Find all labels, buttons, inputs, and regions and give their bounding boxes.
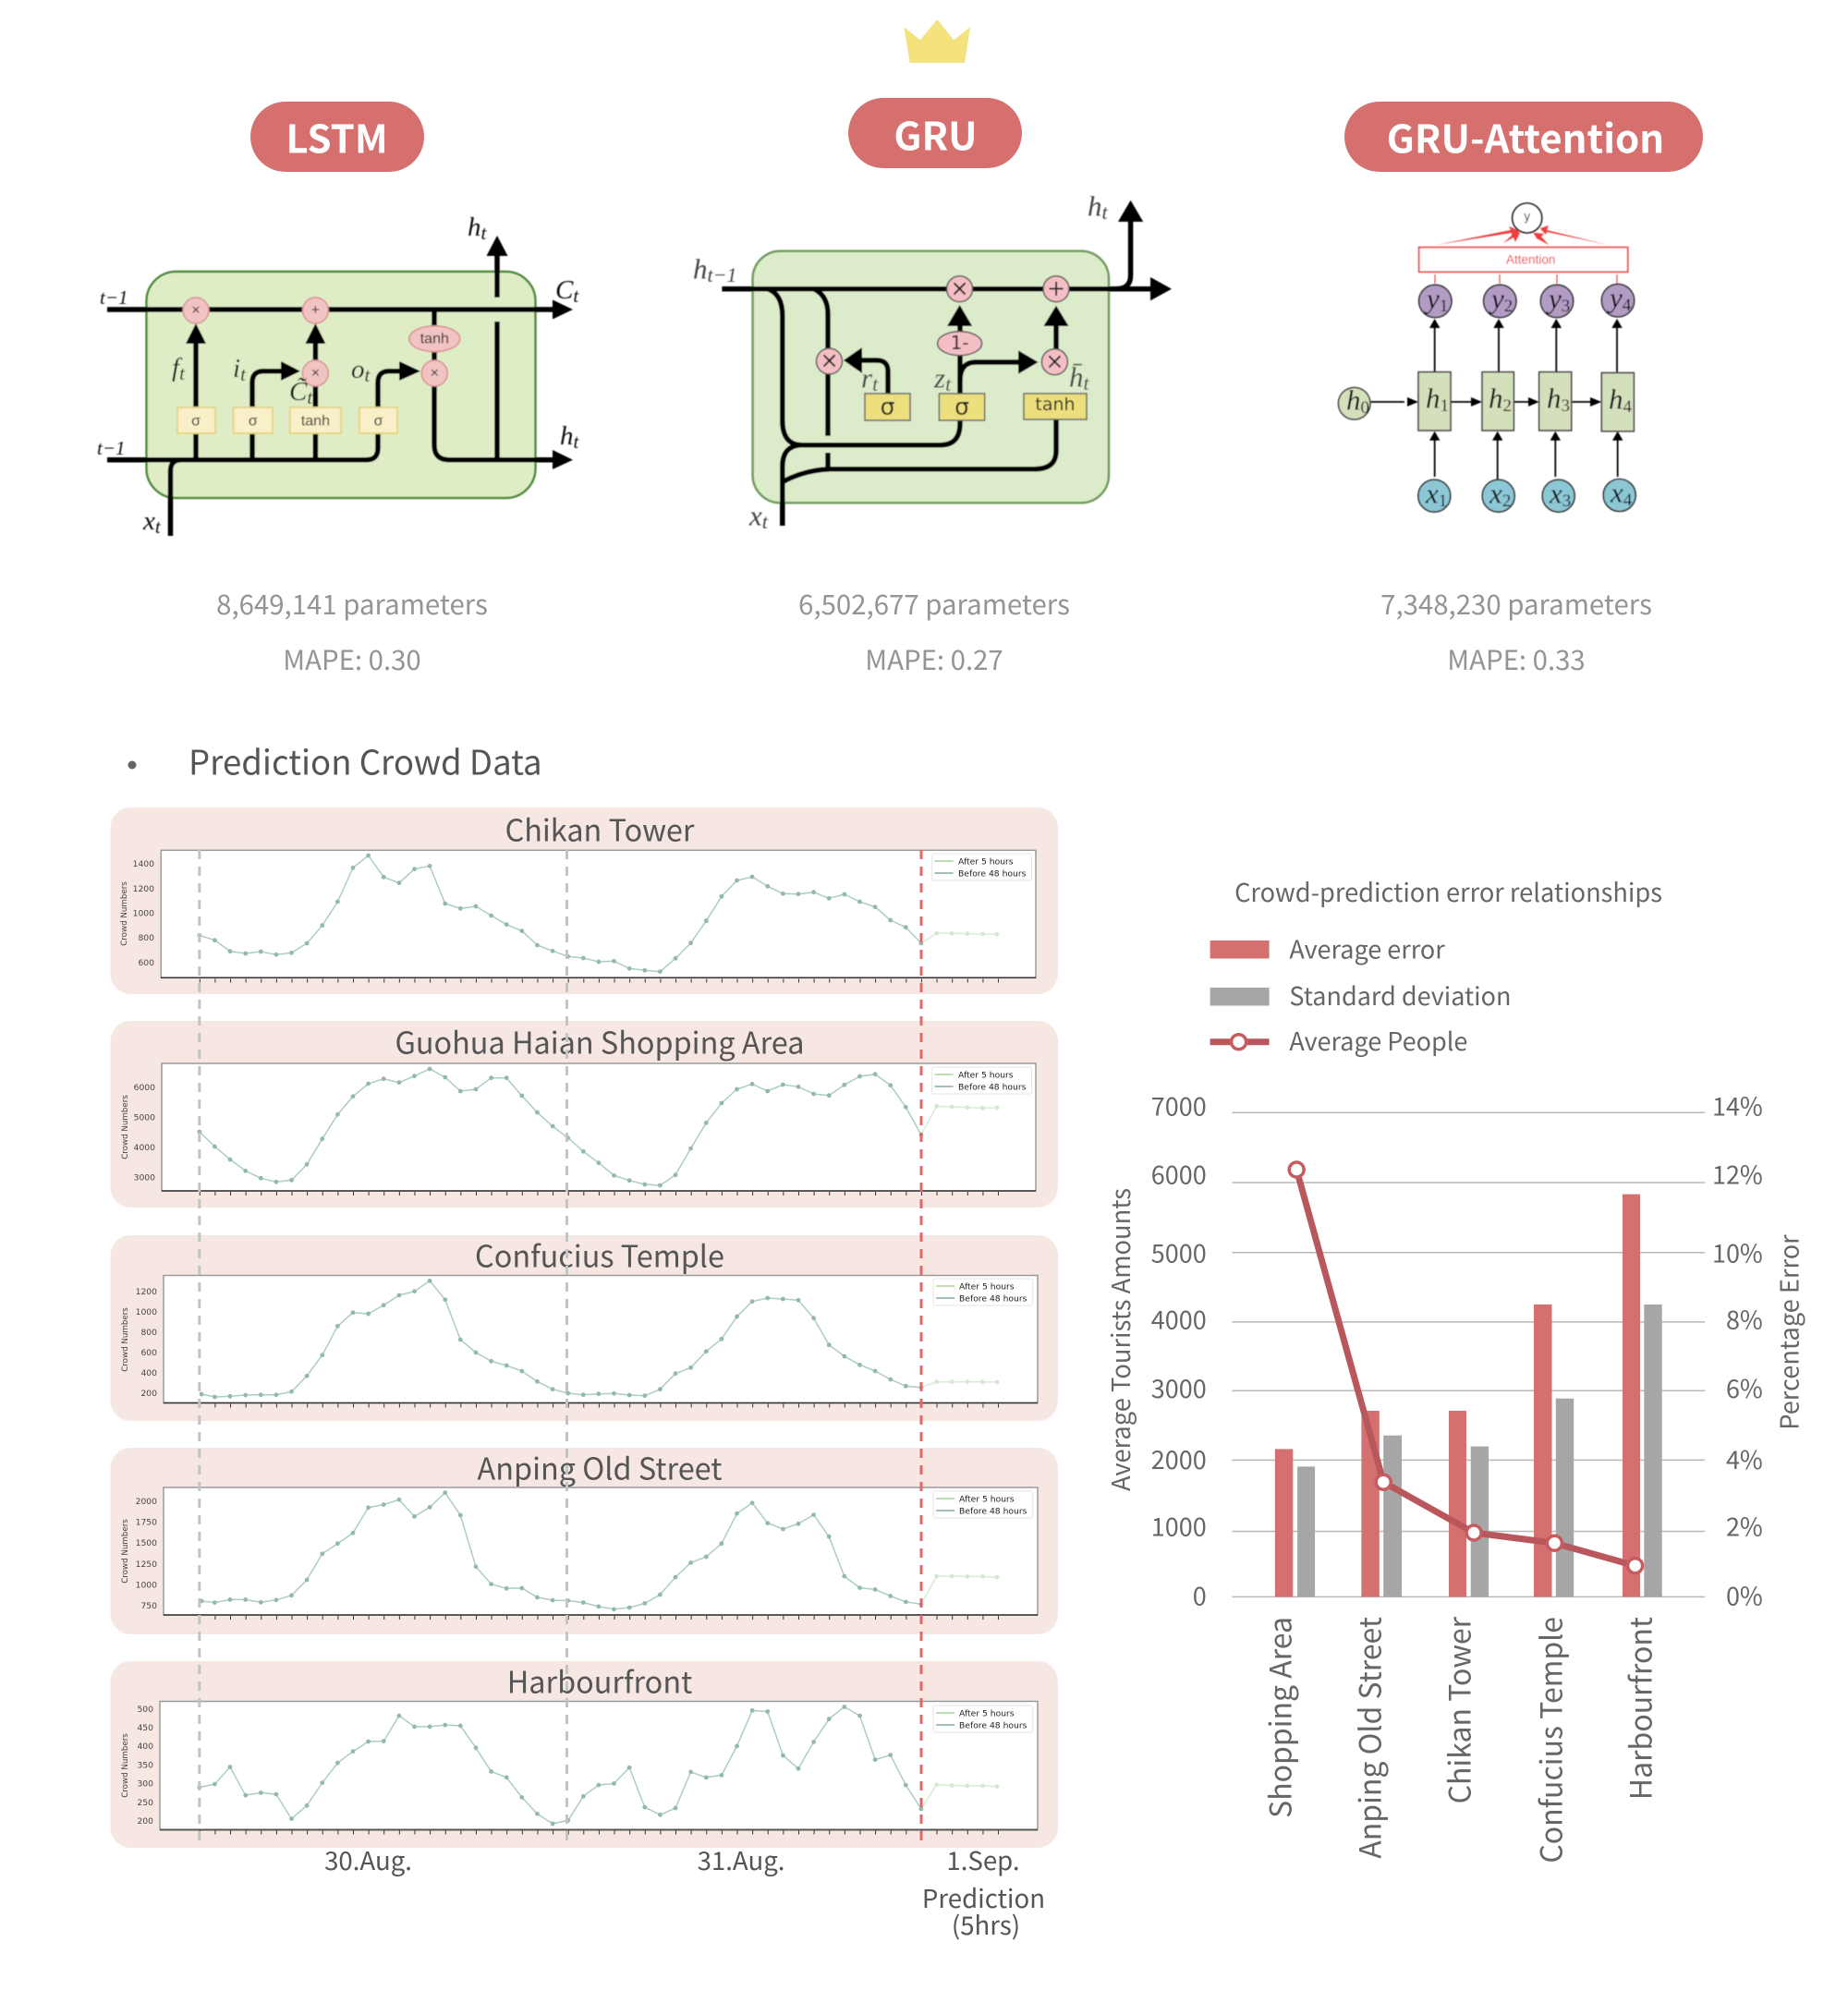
diagram: GRU cell: x: [749, 499, 762, 532]
diagram: GRU cell: t: [1083, 371, 1090, 394]
diagram: GRU cell: h̄: [1069, 360, 1083, 394]
diagram: LSTM cell: t: [307, 386, 313, 408]
diagram: GRU cell: t: [872, 371, 879, 395]
diagram: LSTM cell: t: [573, 431, 580, 453]
diagram: GRU-Attention network: [1338, 203, 1635, 512]
diagram: LSTM cell: +: [311, 303, 320, 318]
panel: Anping Old Street: Crowd Numbers: [121, 1519, 130, 1584]
diagram: GRU-Attention network: 1: [1439, 492, 1447, 510]
chart legend: Standard deviation: [1289, 977, 1511, 1013]
combo chart: bars, line and axes: 4%: [1726, 1440, 1763, 1476]
panel: Confucius Temple: After 5 hours: [959, 1282, 1015, 1292]
diagram: GRU-Attention network: Attention: [1506, 253, 1555, 266]
panel: Confucius Temple: 1200: [136, 1287, 157, 1297]
GRU stats text: [798, 584, 1070, 678]
LSTM stats text: [216, 584, 488, 678]
diagram: GRU-Attention network: h: [1346, 384, 1360, 416]
time axis labels: 31.Aug.: [698, 1840, 784, 1877]
diagram: GRU-Attention network: 1: [1440, 296, 1448, 316]
panel: Harbourfront: 500: [137, 1705, 153, 1715]
panel: Confucius Temple: 600: [140, 1348, 157, 1358]
panel: Anping Old Street: 1750: [136, 1518, 157, 1528]
combo chart: bars, line and axes: 6000: [1151, 1155, 1207, 1192]
diagram: GRU-Attention network: 3: [1562, 296, 1570, 316]
diagram: GRU cell: σ: [881, 394, 895, 419]
diagram: LSTM cell: C: [555, 275, 573, 305]
panel: Harbourfront: 200: [137, 1816, 153, 1827]
time axis labels: Prediction: [922, 1878, 1045, 1915]
combo chart: bars, line and axes: Chikan Tower: [1438, 1616, 1480, 1803]
panel: Chikan Tower: 1200: [133, 884, 154, 894]
panel: Harbourfront: Harbourfront: [507, 1659, 692, 1702]
diagram: LSTM cell: ×: [311, 366, 320, 381]
panel: Confucius Temple: 800: [140, 1328, 157, 1338]
combo chart: bars, line and axes: 6%: [1726, 1369, 1763, 1405]
diagram: GRU-Attention network: y: [1610, 281, 1623, 314]
GRU-Attention stats text: 7,348,230 parameters: [1380, 584, 1652, 623]
diagram: GRU cell: t: [945, 371, 952, 395]
chart legend: Average error: [1289, 929, 1445, 966]
diagram: LSTM cell: t: [364, 364, 371, 386]
panel: Chikan Tower: Crowd Numbers: [120, 881, 129, 946]
panel: Harbourfront: Before 48 hours: [959, 1720, 1027, 1731]
diagram: GRU-Attention network: h: [1609, 382, 1623, 416]
time axis labels: (5hrs): [952, 1905, 1020, 1942]
diagram: LSTM cell: σ: [191, 414, 201, 429]
LSTM pill heading: [250, 102, 424, 172]
diagram: GRU-Attention network: 3: [1562, 395, 1570, 416]
section heading: Prediction Crowd Data: Prediction Crowd Data: [188, 735, 542, 785]
diagram: LSTM cell: x: [143, 506, 155, 536]
panel: Guohua Haian Shopping Area: Crowd Numbers: [121, 1095, 130, 1159]
diagram: GRU cell: ×: [951, 275, 969, 301]
diagram: GRU-Attention network: y: [1549, 283, 1562, 314]
panel: Guohua Haian Shopping Area: 5000: [134, 1112, 155, 1123]
diagram: GRU-Attention network: 0: [1360, 397, 1369, 418]
combo chart: bars, line and axes: 2%: [1726, 1508, 1763, 1543]
diagram: LSTM cell: t−1: [100, 286, 128, 309]
diagram: GRU cell: [693, 190, 1172, 532]
panel: Confucius Temple: Confucius Temple: [475, 1232, 724, 1277]
diagram: GRU cell: t: [762, 510, 769, 532]
combo chart: bars, line and axes: 12%: [1712, 1155, 1763, 1192]
GRU-Attention stats text: [1380, 584, 1652, 678]
diagram: LSTM cell: o: [351, 355, 364, 384]
panel: Harbourfront: 400: [137, 1742, 153, 1752]
panel: Guohua Haian Shopping Area: Before 48 hours: [958, 1083, 1027, 1092]
diagram: GRU-Attention network: x: [1426, 477, 1439, 510]
diagram: LSTM cell: ×: [191, 303, 201, 318]
panel: Confucius Temple: [111, 1232, 1058, 1421]
diagram: LSTM cell: t: [573, 285, 579, 307]
combo chart: bars, line and axes: Shopping Area: [1258, 1617, 1301, 1818]
GRU-Attention pill heading: [1344, 102, 1703, 172]
diagram: GRU-Attention network: y: [1524, 211, 1531, 224]
diagram: GRU-Attention network: 4: [1623, 296, 1632, 314]
combo chart: bars, line and axes: Percentage Error: [1769, 1234, 1805, 1430]
icon: crown: [904, 19, 970, 63]
diagram: LSTM cell: tanh: [420, 331, 449, 347]
combo chart: bars, line and axes: 2000: [1151, 1440, 1207, 1476]
panel: Chikan Tower: 800: [138, 933, 154, 943]
diagram: GRU-Attention network: y: [1491, 283, 1504, 314]
combo chart: bars, line and axes: 14%: [1712, 1086, 1763, 1123]
panel: Chikan Tower: 1400: [133, 859, 154, 869]
diagram: GRU cell: t−1: [708, 262, 736, 286]
panel: Guohua Haian Shopping Area: Guohua Haian Shopping Area: [395, 1020, 804, 1062]
panel: Chikan Tower: Before 48 hours: [958, 868, 1027, 880]
diagram: LSTM cell: t: [179, 362, 186, 384]
panel: Anping Old Street: 750: [140, 1601, 157, 1611]
combo chart: bars, line and axes: 0: [1193, 1576, 1207, 1613]
diagram: GRU-Attention network: 4: [1623, 397, 1632, 416]
diagram: GRU-Attention network: y: [1427, 283, 1440, 314]
diagram: GRU-Attention network: x: [1489, 477, 1502, 510]
panel: Anping Old Street: Anping Old Street: [478, 1445, 722, 1489]
LSTM stats text: 8,649,141 parameters: [216, 584, 488, 623]
diagram: GRU cell: 1-: [951, 332, 969, 354]
panel: Harbourfront: Crowd Numbers: [121, 1733, 130, 1798]
panel: Confucius Temple: 400: [140, 1368, 157, 1378]
panel: Anping Old Street: 2000: [136, 1497, 157, 1507]
diagram: GRU-Attention network: 2: [1502, 395, 1512, 416]
panel: Guohua Haian Shopping Area: 4000: [134, 1143, 155, 1153]
panel: Guohua Haian Shopping Area: 3000: [134, 1173, 155, 1183]
time axis labels: [324, 1840, 1045, 1942]
diagram: GRU cell: σ: [954, 394, 969, 419]
GRU stats text: 6,502,677 parameters: [798, 584, 1070, 623]
diagram: LSTM cell: h: [468, 212, 480, 242]
diagram: LSTM cell: i: [233, 354, 240, 383]
combo chart: bars, line and axes: Anping Old Street: [1347, 1617, 1390, 1859]
combo chart: bars, line and axes: Average Tourists Amounts: [1100, 1188, 1137, 1491]
diagram: LSTM cell: t−1: [97, 437, 126, 459]
panel: Harbourfront: [111, 1659, 1058, 1848]
time axis labels: 30.Aug.: [324, 1840, 412, 1877]
diagram: GRU-Attention network: 1: [1440, 395, 1449, 416]
diagram: GRU cell: +: [1047, 275, 1065, 301]
combo chart: bars, line and axes: [1100, 1086, 1805, 1863]
panel: Harbourfront: 450: [137, 1723, 153, 1733]
panel: Chikan Tower: [111, 807, 1058, 994]
diagram: GRU-Attention network: x: [1611, 477, 1623, 508]
diagram: LSTM cell: f: [172, 353, 179, 382]
time axis labels: 1.Sep.: [946, 1840, 1020, 1877]
panel: Confucius Temple: 200: [140, 1389, 157, 1399]
time dividers: day boundaries and prediction start: [200, 850, 921, 1845]
panel: Guohua Haian Shopping Area: After 5 hours: [958, 1070, 1014, 1081]
diagram: LSTM cell: C̃: [289, 377, 307, 407]
diagram: LSTM cell: t: [240, 363, 247, 385]
diagram: GRU cell: ×: [820, 347, 839, 373]
chart legend: [1210, 929, 1511, 1058]
chart title: crowd-prediction error: Crowd-prediction error relationships: [1234, 872, 1662, 909]
diagram: GRU cell: z: [934, 362, 945, 394]
combo chart: bars, line and axes: 8%: [1726, 1301, 1763, 1336]
panel: Anping Old Street: After 5 hours: [959, 1495, 1015, 1504]
panel: Confucius Temple: 1000: [136, 1307, 157, 1317]
panel: Harbourfront: After 5 hours: [959, 1709, 1015, 1718]
diagram: LSTM cell: t: [155, 516, 162, 538]
diagram: GRU cell: h: [693, 253, 708, 285]
panel: Harbourfront: 300: [137, 1779, 153, 1789]
panel: Chikan Tower: Chikan Tower: [505, 807, 695, 850]
diagram: LSTM cell: t: [480, 222, 488, 244]
combo chart: bars, line and axes: Confucius Temple: [1528, 1617, 1571, 1863]
diagram: LSTM cell: σ: [374, 414, 383, 429]
diagram: GRU cell: ×: [1045, 348, 1064, 374]
diagram: GRU-Attention network: h: [1547, 382, 1562, 414]
combo chart: bars, line and axes: 10%: [1712, 1234, 1763, 1269]
panel: Harbourfront: 350: [137, 1761, 153, 1770]
combo chart: bars, line and axes: 5000: [1151, 1234, 1207, 1269]
diagram: LSTM cell: σ: [249, 414, 258, 429]
diagram: GRU-Attention network: 2: [1502, 492, 1511, 510]
diagram: LSTM cell: h: [560, 421, 573, 451]
diagram: GRU cell: r: [861, 362, 872, 394]
panel: Confucius Temple: Before 48 hours: [959, 1293, 1027, 1305]
GRU-Attention stats text: MAPE: 0.33: [1447, 639, 1586, 678]
diagram: GRU-Attention network: h: [1426, 382, 1440, 414]
diagram: GRU cell: h: [1088, 190, 1101, 222]
panel: Confucius Temple: Crowd Numbers: [121, 1307, 130, 1372]
combo chart: bars, line and axes: 1000: [1151, 1508, 1207, 1543]
combo chart: bars, line and axes: 7000: [1151, 1086, 1207, 1123]
diagram: GRU-Attention network: h: [1489, 382, 1502, 414]
panel: Anping Old Street: 1500: [136, 1538, 157, 1548]
combo chart: bars, line and axes: 0%: [1726, 1576, 1763, 1613]
diagram: GRU-Attention network: 4: [1623, 490, 1633, 510]
GRU pill heading: [848, 98, 1022, 168]
diagram: GRU-Attention network: 3: [1562, 492, 1571, 510]
GRU pill heading: GRU: [894, 105, 978, 163]
LSTM pill heading: LSTM: [286, 109, 388, 164]
panel: Guohua Haian Shopping Area: 6000: [134, 1083, 155, 1093]
LSTM stats text: MAPE: 0.30: [283, 639, 421, 678]
diagram: GRU-Attention network: x: [1550, 477, 1562, 510]
combo chart: bars, line and axes: 4000: [1151, 1301, 1207, 1336]
GRU-Attention pill heading: GRU-Attention: [1387, 109, 1664, 164]
panel: Anping Old Street: 1000: [136, 1580, 157, 1591]
diagram: LSTM cell: tanh: [301, 414, 330, 429]
combo chart: bars, line and axes: 3000: [1151, 1369, 1207, 1405]
panel: Chikan Tower: 600: [138, 958, 154, 968]
panel: Anping Old Street: [111, 1445, 1058, 1634]
panel: Harbourfront: 250: [137, 1798, 153, 1808]
GRU stats text: MAPE: 0.27: [865, 639, 1003, 678]
diagram: GRU cell: t: [1101, 200, 1109, 224]
panel: Anping Old Street: Before 48 hours: [959, 1506, 1027, 1517]
panel: Chikan Tower: After 5 hours: [958, 857, 1014, 867]
diagram: GRU cell: tanh: [1035, 395, 1076, 415]
chart legend: Average People: [1289, 1022, 1467, 1058]
panel: Chikan Tower: 1000: [133, 909, 154, 918]
diagram: GRU-Attention network: 2: [1504, 296, 1513, 316]
diagram: LSTM cell: ×: [431, 366, 439, 381]
diagram: LSTM cell: [97, 212, 580, 538]
combo chart: bars, line and axes: Harbourfront: [1619, 1617, 1661, 1800]
panel: Guohua Haian Shopping Area: [111, 1020, 1058, 1208]
panel: Anping Old Street: 1250: [136, 1560, 157, 1570]
